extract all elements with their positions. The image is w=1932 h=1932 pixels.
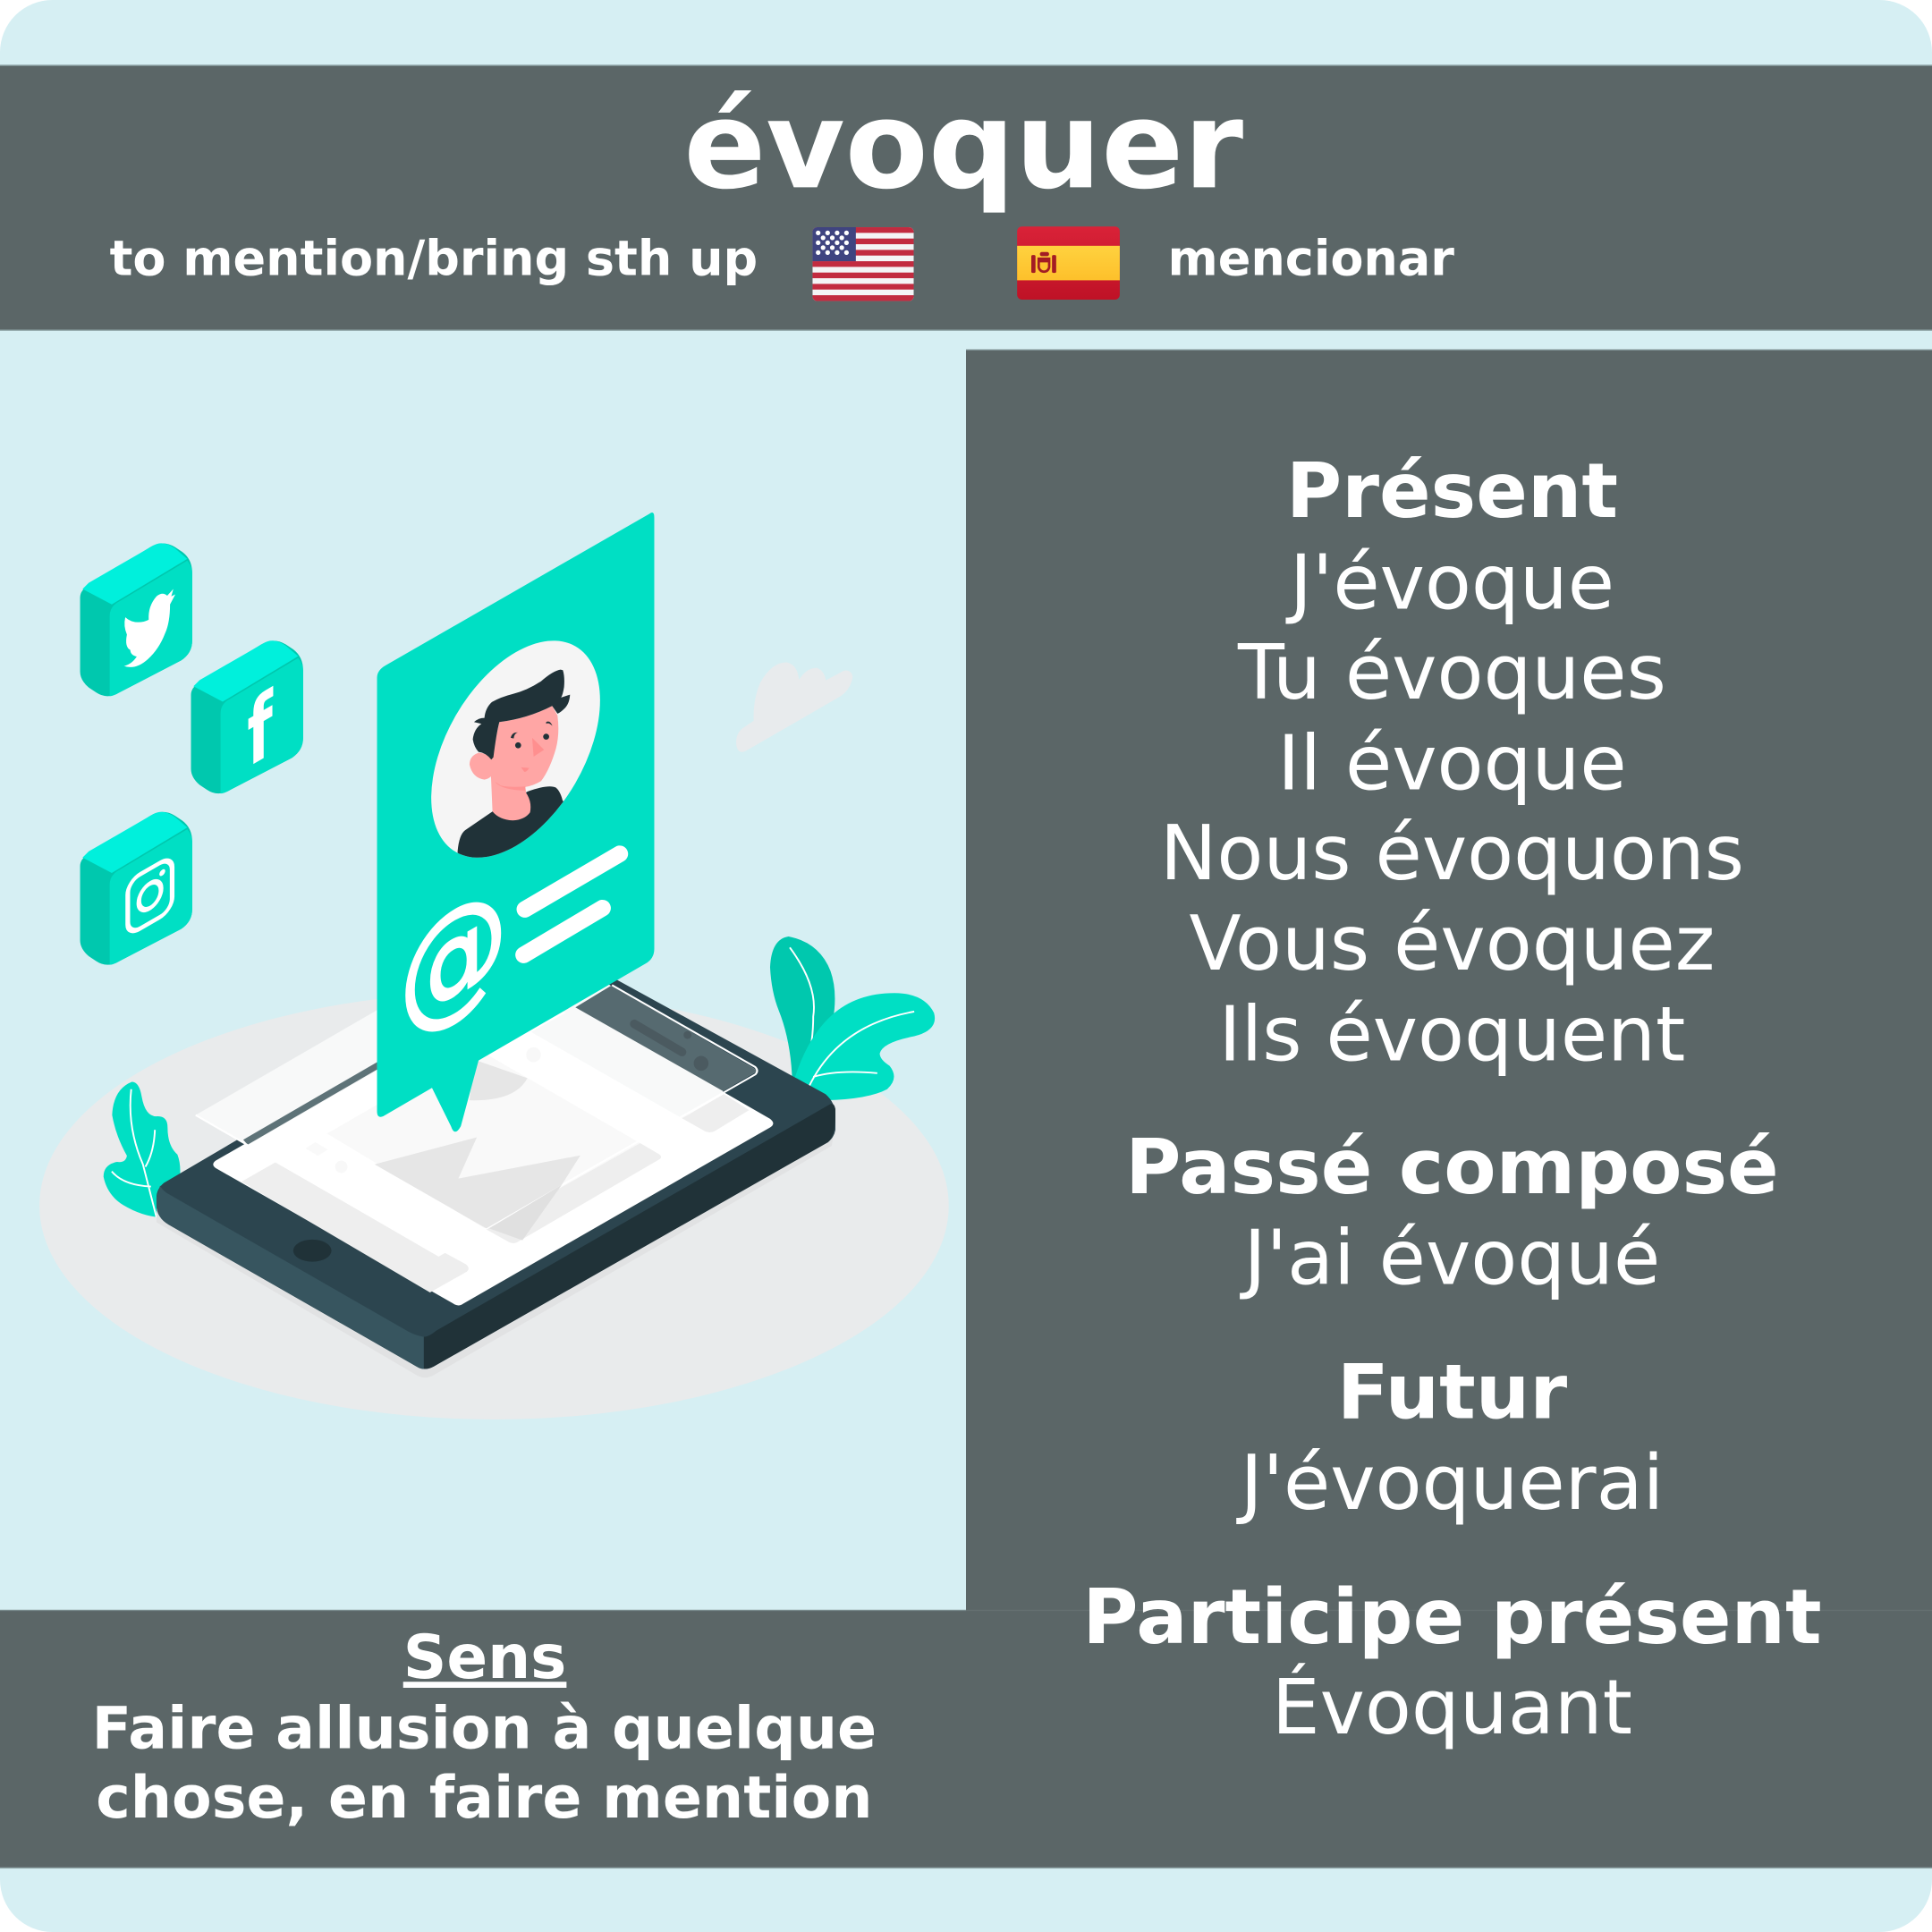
present tense: Ils évoquent — [1219, 990, 1685, 1079]
meaning text: chose, en faire mention — [96, 1765, 873, 1832]
panel: meaning — [0, 1573, 1932, 1868]
spanish translation: mencionar — [1167, 231, 1454, 287]
present participle: Participe présent — [1082, 1573, 1822, 1662]
present tense: Il évoque — [1277, 719, 1627, 808]
present tense: Nous évoquons — [1160, 809, 1744, 898]
text lines — [523, 854, 620, 955]
avatar person — [458, 670, 570, 870]
present tense: J'évoque — [1285, 539, 1614, 628]
present tense — [1160, 447, 1744, 1079]
avatar disc — [431, 604, 600, 894]
icon: twitter block — [80, 543, 192, 696]
screen card: right — [682, 1094, 750, 1132]
home button — [293, 1240, 332, 1262]
present participle: Évoquant — [1272, 1662, 1632, 1752]
image placeholder sun — [470, 1060, 528, 1100]
past tense: J'ai évoqué — [1240, 1214, 1660, 1302]
future tense: J'évoquerai — [1236, 1439, 1664, 1528]
phone — [157, 952, 835, 1377]
glass overlay card — [196, 930, 758, 1256]
icon: Spain flag — [1017, 226, 1120, 300]
icon: left plant — [104, 1081, 180, 1217]
icon: right plant — [770, 936, 935, 1100]
icon: facebook block: f — [247, 672, 274, 789]
future tense — [1236, 1349, 1664, 1528]
past tense — [1125, 1123, 1779, 1302]
future tense: Futur — [1337, 1349, 1567, 1437]
screen card: lower left — [242, 1162, 469, 1292]
illustration: social media mention — [39, 513, 949, 1419]
present participle — [1082, 1573, 1822, 1752]
meaning heading: Sens — [403, 1622, 566, 1692]
icon: instagram block — [80, 812, 192, 965]
screen card: image — [487, 1143, 661, 1243]
icon: facebook block — [191, 640, 303, 793]
meaning text — [92, 1696, 877, 1832]
icon: US flag — [812, 227, 914, 301]
ground ellipse — [39, 992, 949, 1419]
at sign: @ — [399, 851, 508, 1063]
phone screen — [213, 981, 773, 1306]
title: évoquer — [683, 74, 1243, 216]
past tense: Passé composé — [1125, 1123, 1779, 1212]
icon: cloud — [736, 663, 852, 752]
present tense: Tu évoques — [1237, 629, 1666, 717]
panel: conjugation — [966, 350, 1932, 1868]
image placeholder mountains — [375, 1137, 580, 1228]
meaning text: Faire allusion à quelque — [92, 1696, 877, 1763]
present tense: Présent — [1286, 447, 1618, 536]
header band — [0, 64, 1932, 331]
english translation: to mention/bring sth up — [110, 231, 758, 287]
present tense: Vous évoquez — [1189, 900, 1715, 988]
profile speech bubble — [377, 513, 654, 1131]
